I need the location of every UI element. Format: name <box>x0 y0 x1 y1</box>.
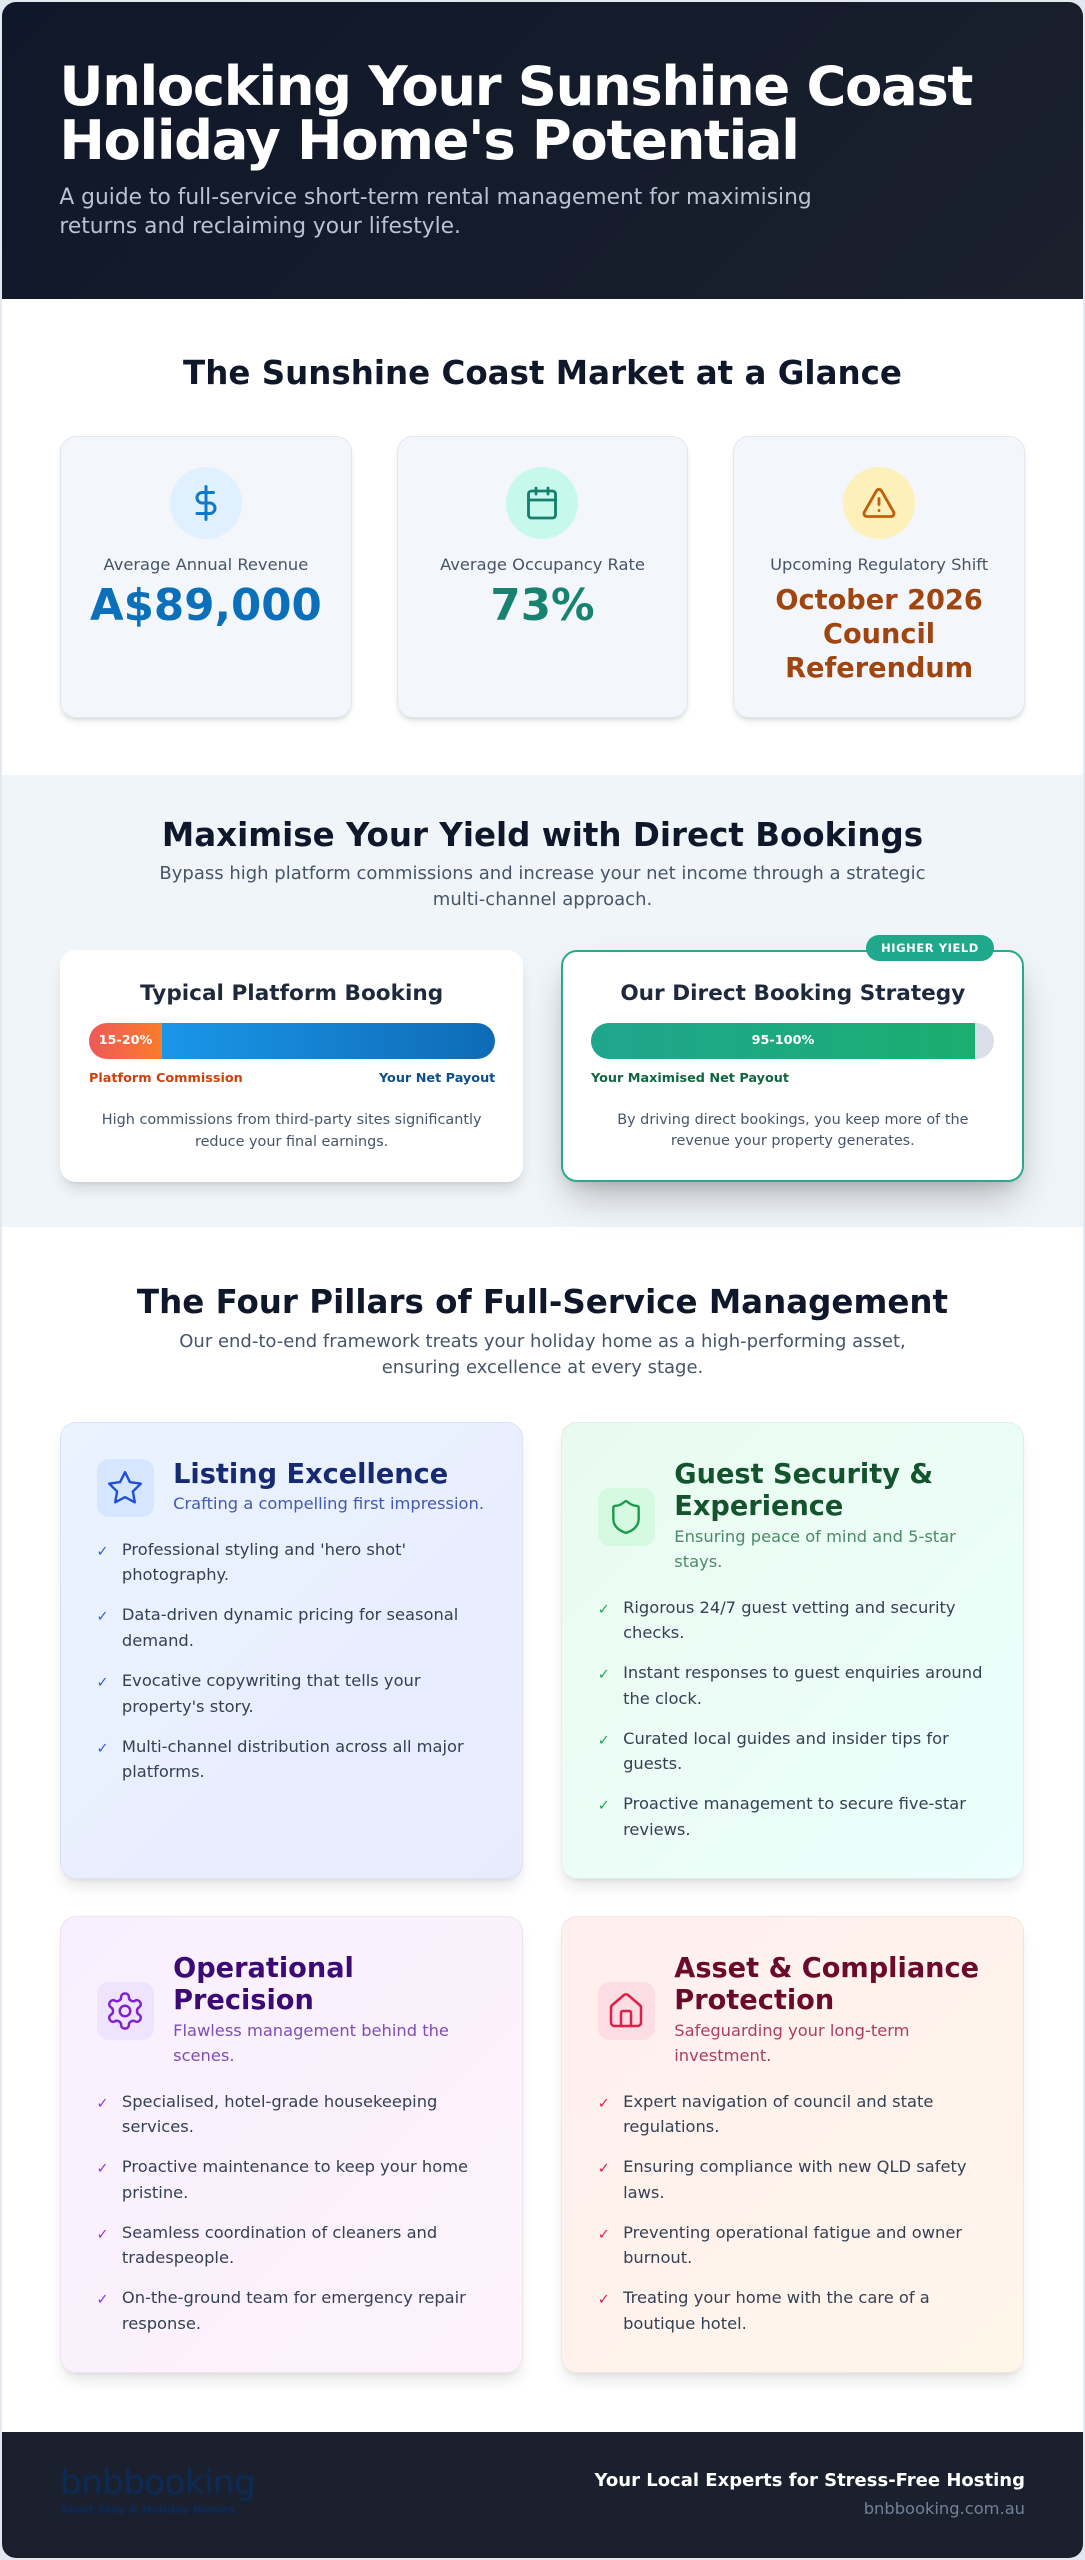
checklist: Expert navigation of council and state regulations. <box>623 2092 933 2136</box>
checklist: Proactive management to secure five-star reviews. <box>623 1794 966 1839</box>
checklist: ✓ <box>96 1741 109 1757</box>
checklist: Instant responses to guest enquiries around the clock. <box>623 1663 982 1708</box>
section description: ensuring excellence at every stage. <box>382 1357 703 1378</box>
label: maximised payout: Your Maximised Net Payout <box>591 1071 789 1086</box>
payout bar: 15-20% <box>99 1033 152 1048</box>
description: High commissions from third-party sites significantly <box>102 1112 482 1128</box>
checklist: Data-driven dynamic pricing for seasonal demand. <box>122 1605 458 1650</box>
stat card: annual revenue <box>60 436 352 718</box>
panel: direct booking strategy <box>561 950 1024 1182</box>
panel: listing excellence <box>60 1422 523 1879</box>
icon: shield <box>598 1488 655 1546</box>
subtitle: returns and reclaiming your lifestyle. <box>59 214 461 239</box>
heading: market at a glance: The Sunshine Coast Market at a Glance <box>183 354 902 392</box>
checklist: Treating your home with the care of a boutique hotel. <box>623 2288 930 2333</box>
label: Average Annual Revenue <box>104 555 308 574</box>
payout bar <box>591 1023 994 1059</box>
checklist: ✓ <box>598 2227 610 2243</box>
logo wordmark: Short Stay & Holiday Homes <box>60 2503 235 2516</box>
checklist: ✓ <box>598 1733 610 1749</box>
label: net payout: Your Net Payout <box>379 1071 495 1086</box>
checklist: ✓ <box>598 2161 610 2177</box>
checklist: Curated local guides and insider tips for guests. <box>623 1729 949 1773</box>
checklist: ✓ <box>96 1544 109 1560</box>
card header <box>97 1459 484 1517</box>
heading text: Safeguarding your long-term investment. <box>674 2021 910 2065</box>
checklist: Ensuring compliance with new QLD safety laws. <box>623 2157 966 2202</box>
label: Upcoming Regulatory Shift <box>770 555 988 574</box>
checklist: ✓ <box>96 1675 109 1691</box>
icon: house <box>598 1982 655 2040</box>
icon: dollar <box>170 467 242 539</box>
label: commission: Platform Commission <box>89 1071 243 1086</box>
heading text: Guest Security & Experience <box>674 1459 933 1522</box>
panel: operational precision <box>60 1916 523 2373</box>
checklist: ✓ <box>598 2096 610 2112</box>
checklist: Multi-channel distribution across all major platforms. <box>122 1737 464 1781</box>
checklist: ✓ <box>598 2292 610 2308</box>
subtitle: A guide to full-service short-term rental management for maximising <box>59 185 812 210</box>
checklist: ✓ <box>96 2227 109 2243</box>
panel: direct bookings band <box>2 775 1083 1227</box>
title: Holiday Home's Potential <box>59 109 799 172</box>
value: A$89,000 <box>90 581 322 631</box>
checklist: ✓ <box>598 1667 610 1683</box>
checklist <box>598 1598 982 1839</box>
panel: guest security <box>561 1422 1024 1879</box>
description <box>617 1112 968 1149</box>
heading text: Asset & Compliance Protection <box>674 1953 979 2016</box>
checklist: Evocative copywriting that tells your property's story. <box>122 1671 421 1716</box>
section description: multi-channel approach. <box>433 889 652 910</box>
icon: warning <box>843 467 915 539</box>
checklist: ✓ <box>96 1609 109 1625</box>
title <box>59 55 972 172</box>
section description <box>179 1331 906 1378</box>
checklist <box>598 2092 966 2333</box>
footer <box>2 2432 1083 2558</box>
card header <box>598 1459 956 1571</box>
heading text <box>173 1459 484 1513</box>
card title: Our Direct Booking Strategy <box>620 981 965 1006</box>
heading text <box>173 1953 449 2065</box>
checklist: ✓ <box>598 1798 610 1814</box>
value: October 2026 <box>775 585 983 616</box>
checklist <box>96 2092 468 2333</box>
icon: calendar <box>506 467 578 539</box>
heading text <box>674 1953 979 2065</box>
icon: gear <box>96 1982 154 2040</box>
payout bar <box>89 1023 495 1059</box>
stat card: occupancy <box>397 436 688 718</box>
card header <box>97 1953 449 2065</box>
heading text: Operational Precision <box>173 1953 354 2016</box>
title: Unlocking Your Sunshine Coast <box>59 55 972 118</box>
value: Referendum <box>785 653 973 684</box>
icon: star <box>96 1459 154 1517</box>
checklist: Seamless coordination of cleaners and tradespeople. <box>122 2223 437 2267</box>
checklist <box>96 1540 464 1781</box>
section description: Our end-to-end framework treats your holiday home as a high-performing asset, <box>179 1331 906 1352</box>
value <box>775 585 983 684</box>
description: By driving direct bookings, you keep more of the <box>617 1112 968 1128</box>
section description <box>159 863 926 910</box>
heading: direct bookings: Maximise Your Yield with Direct Bookings <box>162 816 923 854</box>
heading text: Listing Excellence <box>173 1459 448 1490</box>
checklist: Preventing operational fatigue and owner burnout. <box>623 2223 962 2267</box>
checklist: Proactive maintenance to keep your home pristine. <box>122 2157 468 2202</box>
checklist: ✓ <box>96 2096 109 2112</box>
header banner <box>2 2 1083 299</box>
checklist: ✓ <box>96 2161 109 2177</box>
checklist: ✓ <box>96 2292 109 2308</box>
panel: asset and compliance <box>561 1916 1024 2373</box>
checklist: Professional styling and 'hero shot' photography. <box>122 1540 406 1584</box>
heading text <box>674 1459 956 1571</box>
heading text: Flawless management behind the scenes. <box>173 2021 449 2065</box>
checklist: On-the-ground team for emergency repair response. <box>122 2288 466 2333</box>
checklist: Specialised, hotel-grade housekeeping services. <box>122 2092 437 2136</box>
tagline: Your Local Experts for Stress-Free Hosting <box>595 2470 1025 2491</box>
description: reduce your final earnings. <box>195 1134 388 1150</box>
logo wordmark: bnbbooking <box>60 2463 255 2503</box>
subtitle <box>59 185 812 239</box>
website: bnbbooking.com.au <box>864 2499 1025 2518</box>
heading text: Crafting a compelling first impression. <box>173 1494 484 1513</box>
stat card: regulatory shift <box>733 436 1025 718</box>
card header <box>598 1953 979 2065</box>
badge: higher yield <box>866 935 994 961</box>
heading text: Ensuring peace of mind and 5-star stays. <box>674 1527 956 1571</box>
description <box>102 1112 482 1150</box>
badge: higher yield: HIGHER YIELD <box>881 941 979 955</box>
checklist: ✓ <box>598 1602 610 1618</box>
checklist: Rigorous 24/7 guest vetting and security checks. <box>623 1598 956 1642</box>
description: revenue your property generates. <box>671 1133 915 1149</box>
label: Average Occupancy Rate <box>440 555 645 574</box>
payout bar: 95-100% <box>752 1033 814 1048</box>
panel: typical platform booking <box>60 950 523 1182</box>
value: Council <box>823 619 935 650</box>
section description: Bypass high platform commissions and increase your net income through a strategic <box>159 863 926 884</box>
heading: four pillars: The Four Pillars of Full-Service Management <box>137 1283 948 1321</box>
value: 73% <box>490 581 595 631</box>
card title: Typical Platform Booking <box>140 981 443 1006</box>
